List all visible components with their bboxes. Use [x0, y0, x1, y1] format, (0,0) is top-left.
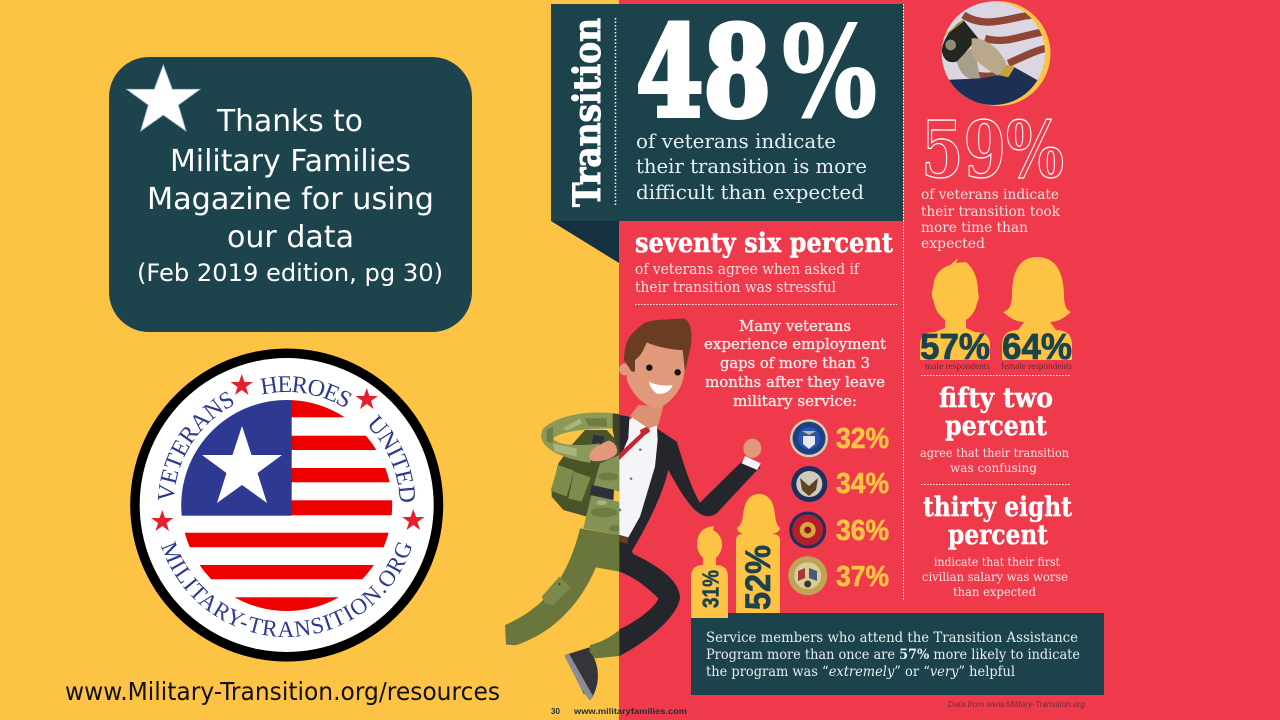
raised fist [743, 439, 761, 458]
camouflage jacket [583, 455, 619, 535]
value 64%: 64% [1002, 326, 1072, 367]
big number 48%: 48 [636, 0, 771, 146]
illustration: running veteran [505, 318, 761, 701]
shirt [619, 413, 658, 537]
chart: female 52% figure [736, 494, 780, 613]
footer: page number and site: www.militaryfamilies.com [573, 707, 687, 716]
stat: fifty two percent: percent [945, 411, 1047, 442]
stat: seventy six percent: their transition was stressful [635, 280, 836, 296]
head [619, 318, 692, 408]
stat: 59 percent: 59% [921, 105, 1064, 196]
respondent labels [925, 361, 1072, 371]
thanks text [137, 104, 443, 287]
stat: thirty eight percent: thirty eight [923, 492, 1072, 523]
camouflage strap [541, 412, 619, 463]
48% caption: their transition is more [636, 154, 867, 178]
stat: thirty eight percent: indicate that their first [934, 555, 1060, 569]
respondent labels: female respondents [1001, 361, 1072, 371]
photo: saluting veteran [940, 0, 1050, 108]
stat: fifty two percent [920, 383, 1069, 475]
48% caption: of veterans indicate [636, 129, 836, 153]
employment gaps text [704, 317, 886, 410]
service percentages: 37% [836, 561, 889, 593]
flag disc [181, 400, 392, 611]
icon: white star [127, 65, 200, 131]
tie [619, 426, 650, 460]
shoe [565, 647, 598, 698]
big number 48%: % [782, 0, 877, 146]
chart: male 31% figure [691, 526, 728, 618]
resources URL: www.Military-Transition.org/resources [65, 677, 500, 706]
thanks text: Military Families [170, 144, 411, 179]
respondent labels: male respondents [925, 361, 991, 371]
logo: Veterans Heroes United badge: MILITARY-TRANSITION.ORG [161, 540, 412, 637]
59% caption: expected [921, 236, 985, 252]
backpack [552, 430, 619, 517]
black trousers [619, 543, 680, 656]
fist on strap [589, 441, 617, 461]
employment gaps text: months after they leave [705, 373, 885, 391]
panel: Transition Assistance callout [691, 613, 1104, 695]
vertical divider [902, 4, 904, 600]
seal: Navy [791, 466, 827, 502]
front leg lower olive [589, 630, 619, 658]
thigh pocket [542, 577, 571, 605]
service percentages [836, 423, 889, 593]
stat: seventy six percent: of veterans agree when asked if [635, 262, 861, 278]
stat: thirty eight percent: civilian salary was worse [922, 570, 1068, 584]
footer: page number and site: 30 [551, 707, 560, 716]
logo: Veterans Heroes United badge: UNITED [370, 414, 415, 502]
belt [619, 535, 628, 544]
value 52%: 52% [739, 545, 778, 610]
48% caption [636, 129, 867, 204]
seal: Army [788, 556, 827, 595]
suit jacket and arm [619, 428, 761, 552]
service percentages: 34% [836, 468, 889, 500]
stat: seventy six percent: seventy six percent [635, 228, 893, 259]
59% caption: their transition took [921, 204, 1061, 220]
59% caption [921, 187, 1061, 252]
callout text [706, 630, 1080, 680]
stat: 59 percent [921, 105, 1064, 252]
stat: thirty eight percent: than expected [953, 585, 1036, 599]
badge text: VETERANS [158, 392, 234, 500]
stat: fifty two percent: was confusing [950, 460, 1037, 475]
callout text: Program more than once are 57% more likely to indicate [706, 647, 1080, 663]
employment gaps text: gaps of more than 3 [720, 354, 870, 372]
value 57%: 57% [920, 326, 990, 367]
callout text: Service members who attend the Transition Assistance [706, 630, 1078, 646]
neck [630, 405, 663, 428]
48% caption: difficult than expected [636, 180, 864, 204]
seal: Air Force [790, 419, 828, 457]
chart: male 57% figure [920, 258, 990, 367]
value 31%: 31% [698, 570, 724, 608]
logo: Veterans Heroes United badge [130, 348, 444, 662]
thanks text: Thanks to [216, 104, 363, 139]
employment gaps text: military service: [733, 392, 857, 410]
chart: female 64% figure [1002, 257, 1072, 367]
59% caption: more time than [921, 220, 1028, 236]
employment gaps text: Many veterans [739, 317, 851, 335]
footer: data source: Data from www.Military-Transition.org [948, 700, 1086, 709]
logo: Veterans Heroes United badge: HEROES [260, 376, 352, 407]
panel: thanks card [109, 57, 472, 332]
badge stars [151, 374, 424, 531]
stat: fifty two percent: fifty two [939, 383, 1053, 414]
stat: seventy six percent [635, 228, 893, 296]
stat: fifty two percent: agree that their transition [920, 445, 1069, 460]
thanks text: our data [227, 220, 354, 255]
seal: Marines [789, 512, 826, 548]
callout text: the program was “extremely” or “very” helpful [706, 664, 1015, 680]
panel: 48 percent header [551, 0, 903, 263]
59% caption: of veterans indicate [921, 187, 1059, 203]
service percentages: 32% [836, 423, 889, 455]
section title: Transition [565, 18, 609, 207]
dark shoulder [613, 413, 619, 448]
thanks text: (Feb 2019 edition, pg 30) [137, 259, 443, 287]
stat: thirty eight percent: percent [948, 520, 1048, 551]
employment gaps text: experience employment [704, 335, 886, 353]
thanks text: Magazine for using [147, 182, 434, 217]
service percentages: 36% [836, 515, 889, 547]
stat: thirty eight percent [922, 492, 1072, 599]
back leg [505, 528, 619, 645]
